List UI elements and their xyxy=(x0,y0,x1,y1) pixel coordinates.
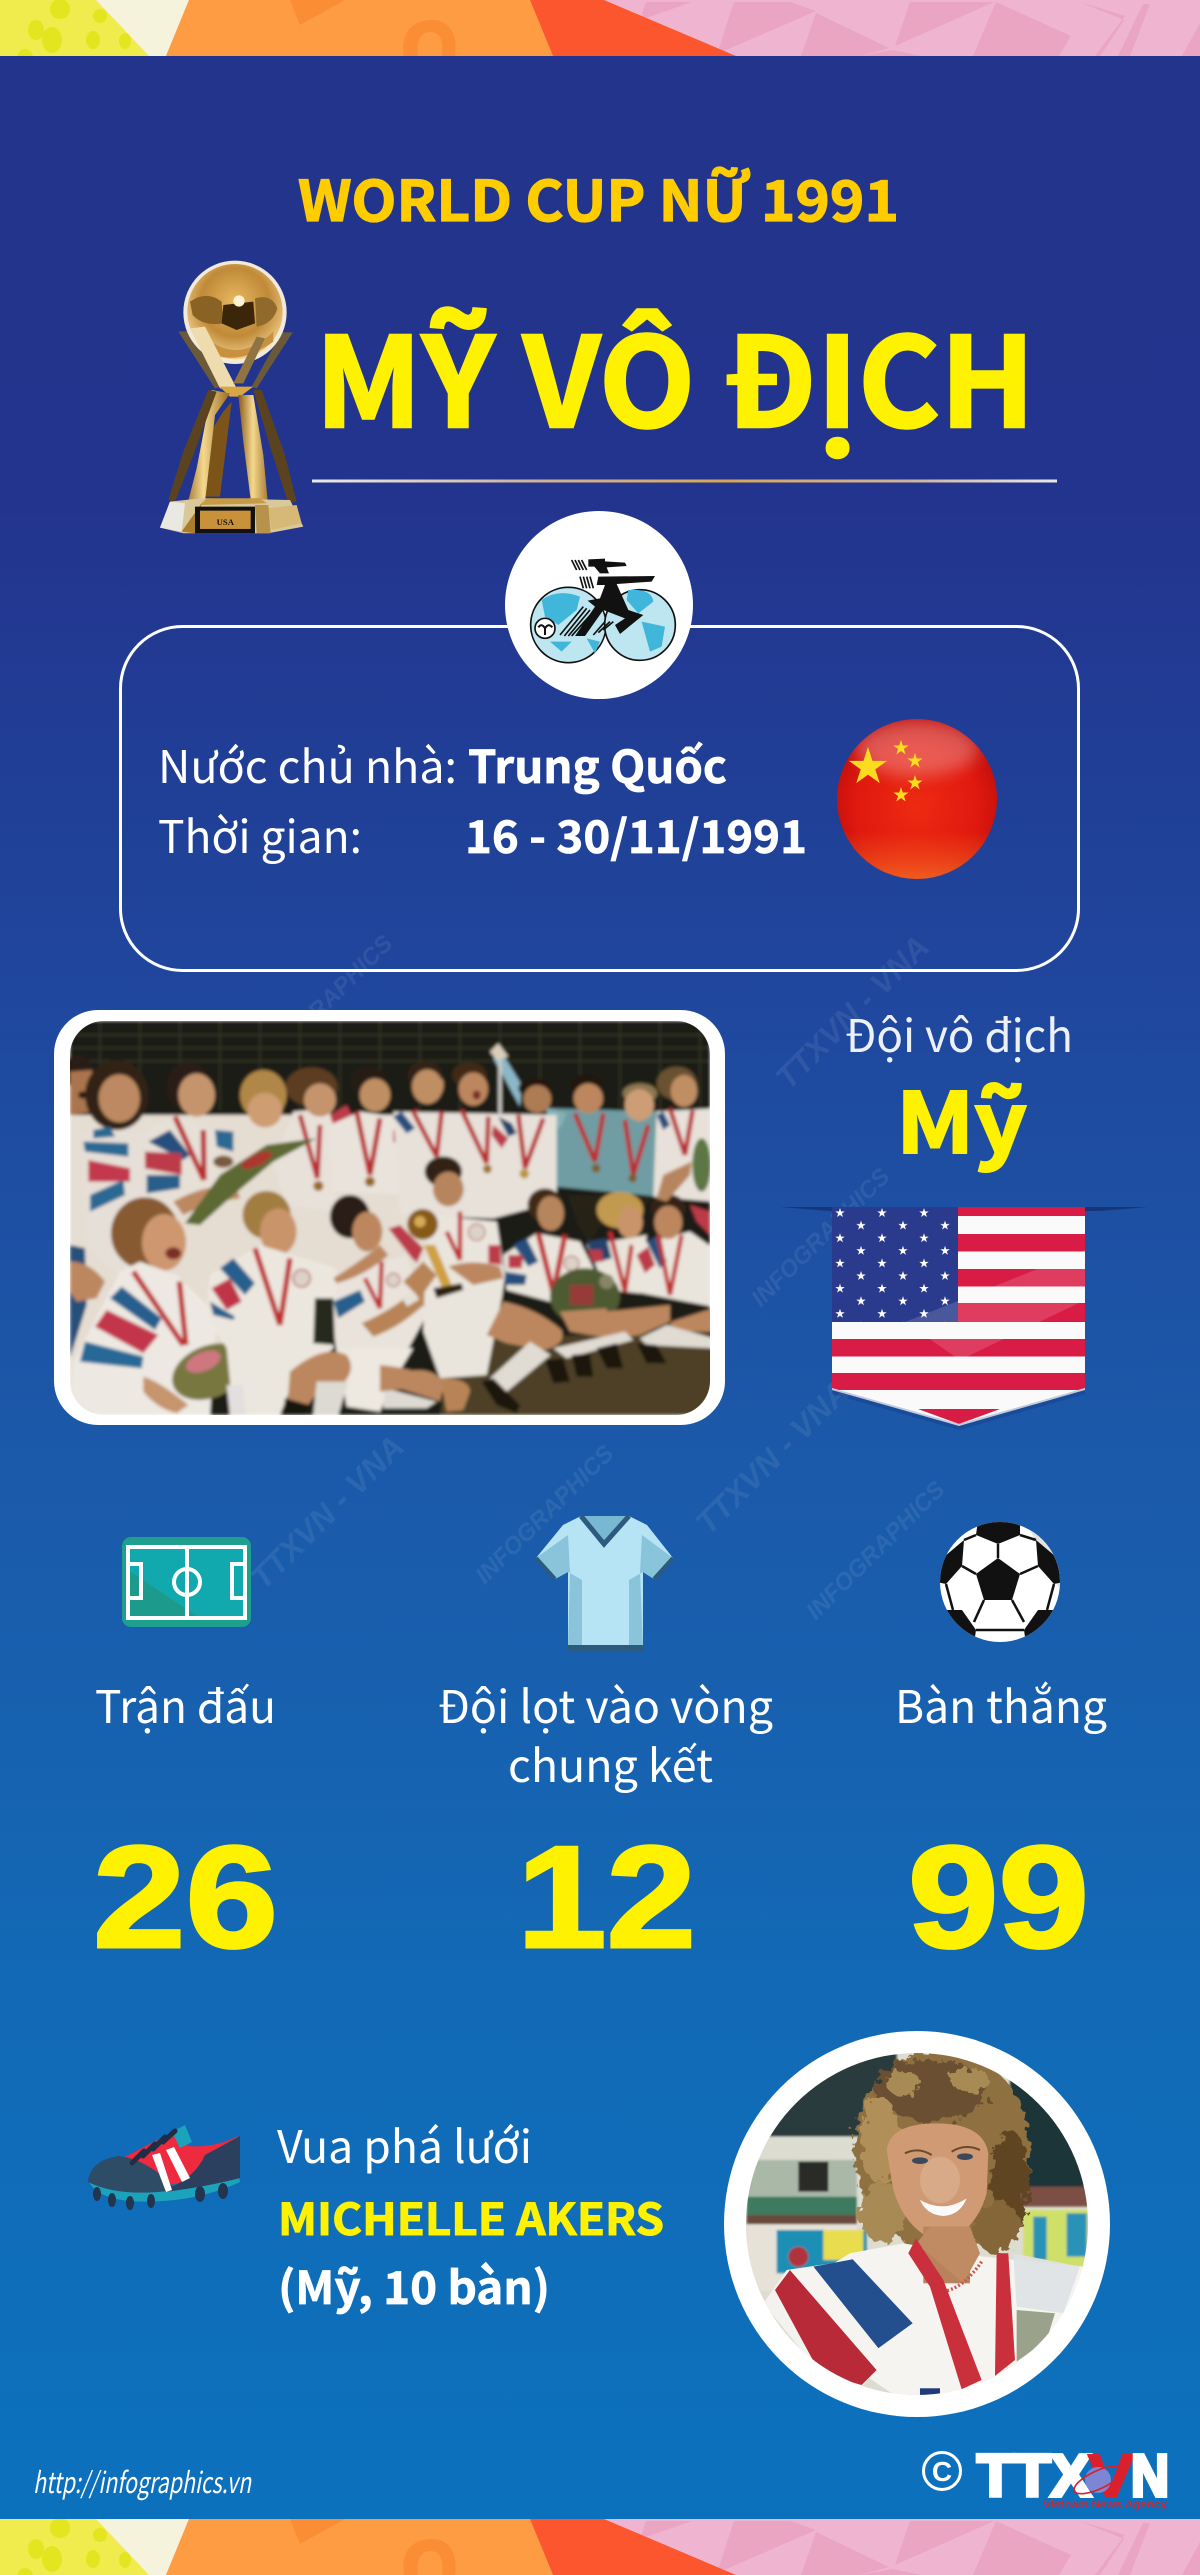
icon: football boot xyxy=(88,2125,240,2210)
label: matches: Trận đấu xyxy=(95,1671,276,1736)
label: goals: Bàn thắng xyxy=(895,1671,1107,1736)
text: top scorer xyxy=(277,2111,664,2317)
name: top scorer: MICHELLE AKERS xyxy=(278,2184,664,2248)
logo: TTXVN copyright xyxy=(924,2443,1169,2511)
icon: soccer ball xyxy=(940,1522,1060,1642)
watermarks: INFOGRAPHICS xyxy=(470,1440,619,1589)
source url: http://infographics.vn xyxy=(33,2460,252,2502)
right half of photo xyxy=(380,1043,713,1415)
title: Mỹ vô địch: MỸ VÔ ĐỊCH xyxy=(315,283,1035,463)
decorative top band xyxy=(0,0,1200,67)
divider under title xyxy=(312,480,1057,482)
watermarks xyxy=(243,928,950,1625)
watermarks: INFOGRAPHICS xyxy=(249,930,398,1079)
number: teams: 12 xyxy=(517,1816,696,1978)
icon: tournament logo xyxy=(505,511,693,699)
label: host country: Nước chủ nhà: xyxy=(158,731,457,796)
icon: US flag pennant xyxy=(780,1207,1148,1430)
details: top scorer: (Mỹ, 10 bàn) xyxy=(278,2252,550,2317)
watermarks: INFOGRAPHICS xyxy=(801,1476,950,1625)
icon: gold trophy: USA xyxy=(217,517,235,527)
decorative bottom band xyxy=(0,2518,1200,2575)
stat: matches xyxy=(93,1537,278,1978)
icon: gold trophy xyxy=(160,261,303,533)
stat: goals xyxy=(895,1520,1107,1978)
logo: TTXVN copyright: N xyxy=(1131,2443,1169,2509)
logo: TTXVN copyright: V xyxy=(1088,2443,1134,2509)
photo: Michelle Akers portrait xyxy=(724,2031,1110,2417)
panel: host info xyxy=(120,626,1078,970)
logo: TTXVN copyright: TTX xyxy=(977,2443,1091,2509)
watermarks: INFOGRAPHICS xyxy=(746,1163,895,1312)
watermarks: TTXVN - VNA xyxy=(768,928,936,1096)
photo: champion team xyxy=(54,1010,725,1425)
left half of photo xyxy=(63,1055,460,1415)
watermarks: TTXVN - VNA xyxy=(243,1428,411,1596)
label: teams: Đội lọt vào vòng xyxy=(438,1671,773,1736)
number: goals: 99 xyxy=(908,1816,1089,1978)
value: dates: 16 - 30/11/1991 xyxy=(465,801,807,866)
title: World Cup: WORLD CUP NỮ 1991 xyxy=(298,157,899,238)
heading: champion team label: Đội vô địch xyxy=(845,1000,1073,1065)
icon: China flag ball xyxy=(837,719,997,879)
heading: champion team name: Mỹ xyxy=(896,1057,1027,1178)
number: matches: 26 xyxy=(93,1816,278,1978)
stat: teams xyxy=(438,1516,773,1978)
watermarks: TTXVN - VNA xyxy=(688,1373,856,1541)
stat: teams: chung kết xyxy=(508,1730,713,1795)
icon: jersey xyxy=(536,1516,673,1651)
value: host country: Trung Quốc xyxy=(468,731,727,796)
logo: TTXVN copyright: C xyxy=(932,2456,952,2487)
logo: TTXVN copyright: Vietnam News Agency xyxy=(1043,2499,1168,2511)
label: dates: Thời gian: xyxy=(158,801,362,866)
label: top scorer: Vua phá lưới xyxy=(277,2111,532,2176)
icon: football pitch xyxy=(122,1537,251,1627)
